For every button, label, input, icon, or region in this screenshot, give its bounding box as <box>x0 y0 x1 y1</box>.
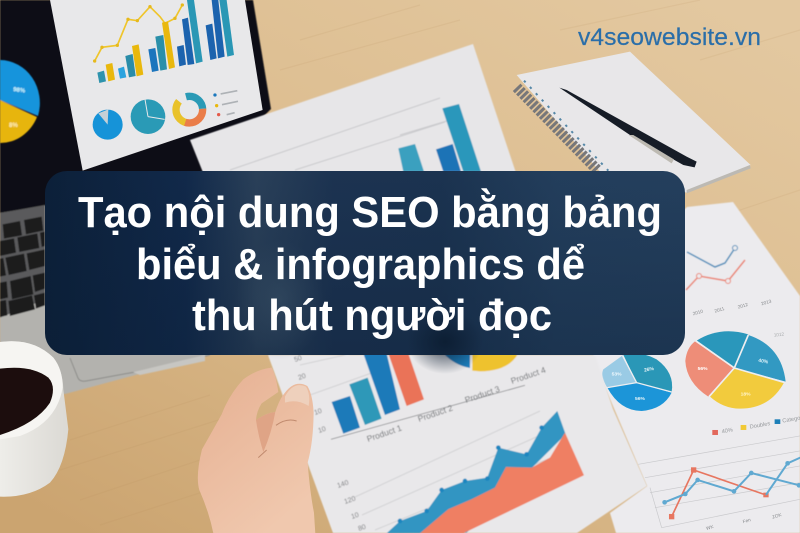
left pie: 53% <box>612 371 622 377</box>
laptop base <box>0 195 210 394</box>
axis numbers: 10 <box>317 426 327 435</box>
axis numbers: 10 <box>350 512 360 521</box>
pies and lower charts on right paper <box>602 299 800 531</box>
keyboard <box>0 205 45 318</box>
blue line chart <box>662 457 800 505</box>
product labels: Product 2 <box>416 403 454 424</box>
product labels <box>365 365 547 444</box>
coffee <box>0 368 53 435</box>
axis labels <box>692 299 783 531</box>
coffee cup <box>0 341 68 497</box>
paper: right charts <box>593 202 800 533</box>
binding holes <box>524 81 608 171</box>
axis numbers <box>293 355 367 533</box>
large pie <box>685 331 786 409</box>
yellow line chart <box>93 3 184 63</box>
axis numbers: 50 <box>293 355 303 364</box>
bars <box>398 104 481 172</box>
axis labels: WK <box>706 524 715 531</box>
notebook with pen <box>517 52 751 193</box>
top line chart <box>686 246 745 290</box>
orange line chart <box>669 467 769 519</box>
paper: lower chart <box>268 345 647 533</box>
axis labels: 2010 <box>692 309 704 316</box>
axis numbers: 140 <box>336 479 350 490</box>
pen <box>559 88 697 167</box>
axis numbers: 20 <box>297 373 307 382</box>
left pie: 26% <box>644 366 655 374</box>
axis numbers: 120 <box>343 495 357 506</box>
middle finger shade <box>256 412 275 452</box>
title line 1: Tạo nội dung SEO bằng bảng <box>78 187 662 237</box>
title panel <box>45 171 685 374</box>
legend <box>712 415 800 435</box>
screen pie charts <box>93 96 203 140</box>
screen legend <box>213 91 238 116</box>
axis labels: Fen <box>742 517 752 524</box>
laptop screen chart page <box>50 0 263 171</box>
product labels: Product 1 <box>365 423 403 444</box>
paper: top centre bar chart <box>190 44 520 300</box>
cup rim <box>0 341 63 439</box>
area chart <box>387 411 584 533</box>
large pie: 18% <box>741 391 751 397</box>
thumb nail <box>285 385 309 406</box>
large pie: 56% <box>698 366 708 372</box>
watermark: v4seowebsite.vn <box>578 24 761 51</box>
axis labels: 2011 <box>714 306 725 314</box>
title line 2: biểu & infographics dể <box>136 240 585 289</box>
product labels: Product 3 <box>463 384 501 405</box>
knuckle creases <box>258 420 297 458</box>
axis numbers: 80 <box>357 524 367 533</box>
axis labels: ZOK <box>772 512 783 520</box>
product labels: Product 4 <box>509 365 547 386</box>
pie fragment <box>443 353 518 371</box>
axis labels: 2013 <box>761 299 772 306</box>
legend: 40% <box>721 427 733 435</box>
trackpad <box>70 355 210 381</box>
left pie: 56% <box>635 396 646 402</box>
axis numbers: 10 <box>313 408 323 417</box>
large pie: 1012 <box>774 332 785 338</box>
title line 3: thu hút người đọc <box>192 291 552 340</box>
axis labels: 2012 <box>737 302 749 310</box>
laptop screen <box>0 0 271 213</box>
bar chart on screen <box>97 0 234 83</box>
large pie: 40% <box>758 358 769 366</box>
screen left pie chart: 8% <box>9 123 18 129</box>
hand holding paper <box>198 368 315 533</box>
grid lines <box>638 436 800 528</box>
cup body <box>0 341 68 497</box>
laptop <box>0 0 271 394</box>
spiral binding <box>517 87 597 170</box>
hand silhouette <box>198 368 315 533</box>
upper bar chart <box>331 353 525 439</box>
screen left pie chart <box>0 60 40 143</box>
left pie <box>602 353 672 411</box>
screen left pie chart: 98% <box>13 87 26 95</box>
legend: Doubles <box>749 421 771 431</box>
